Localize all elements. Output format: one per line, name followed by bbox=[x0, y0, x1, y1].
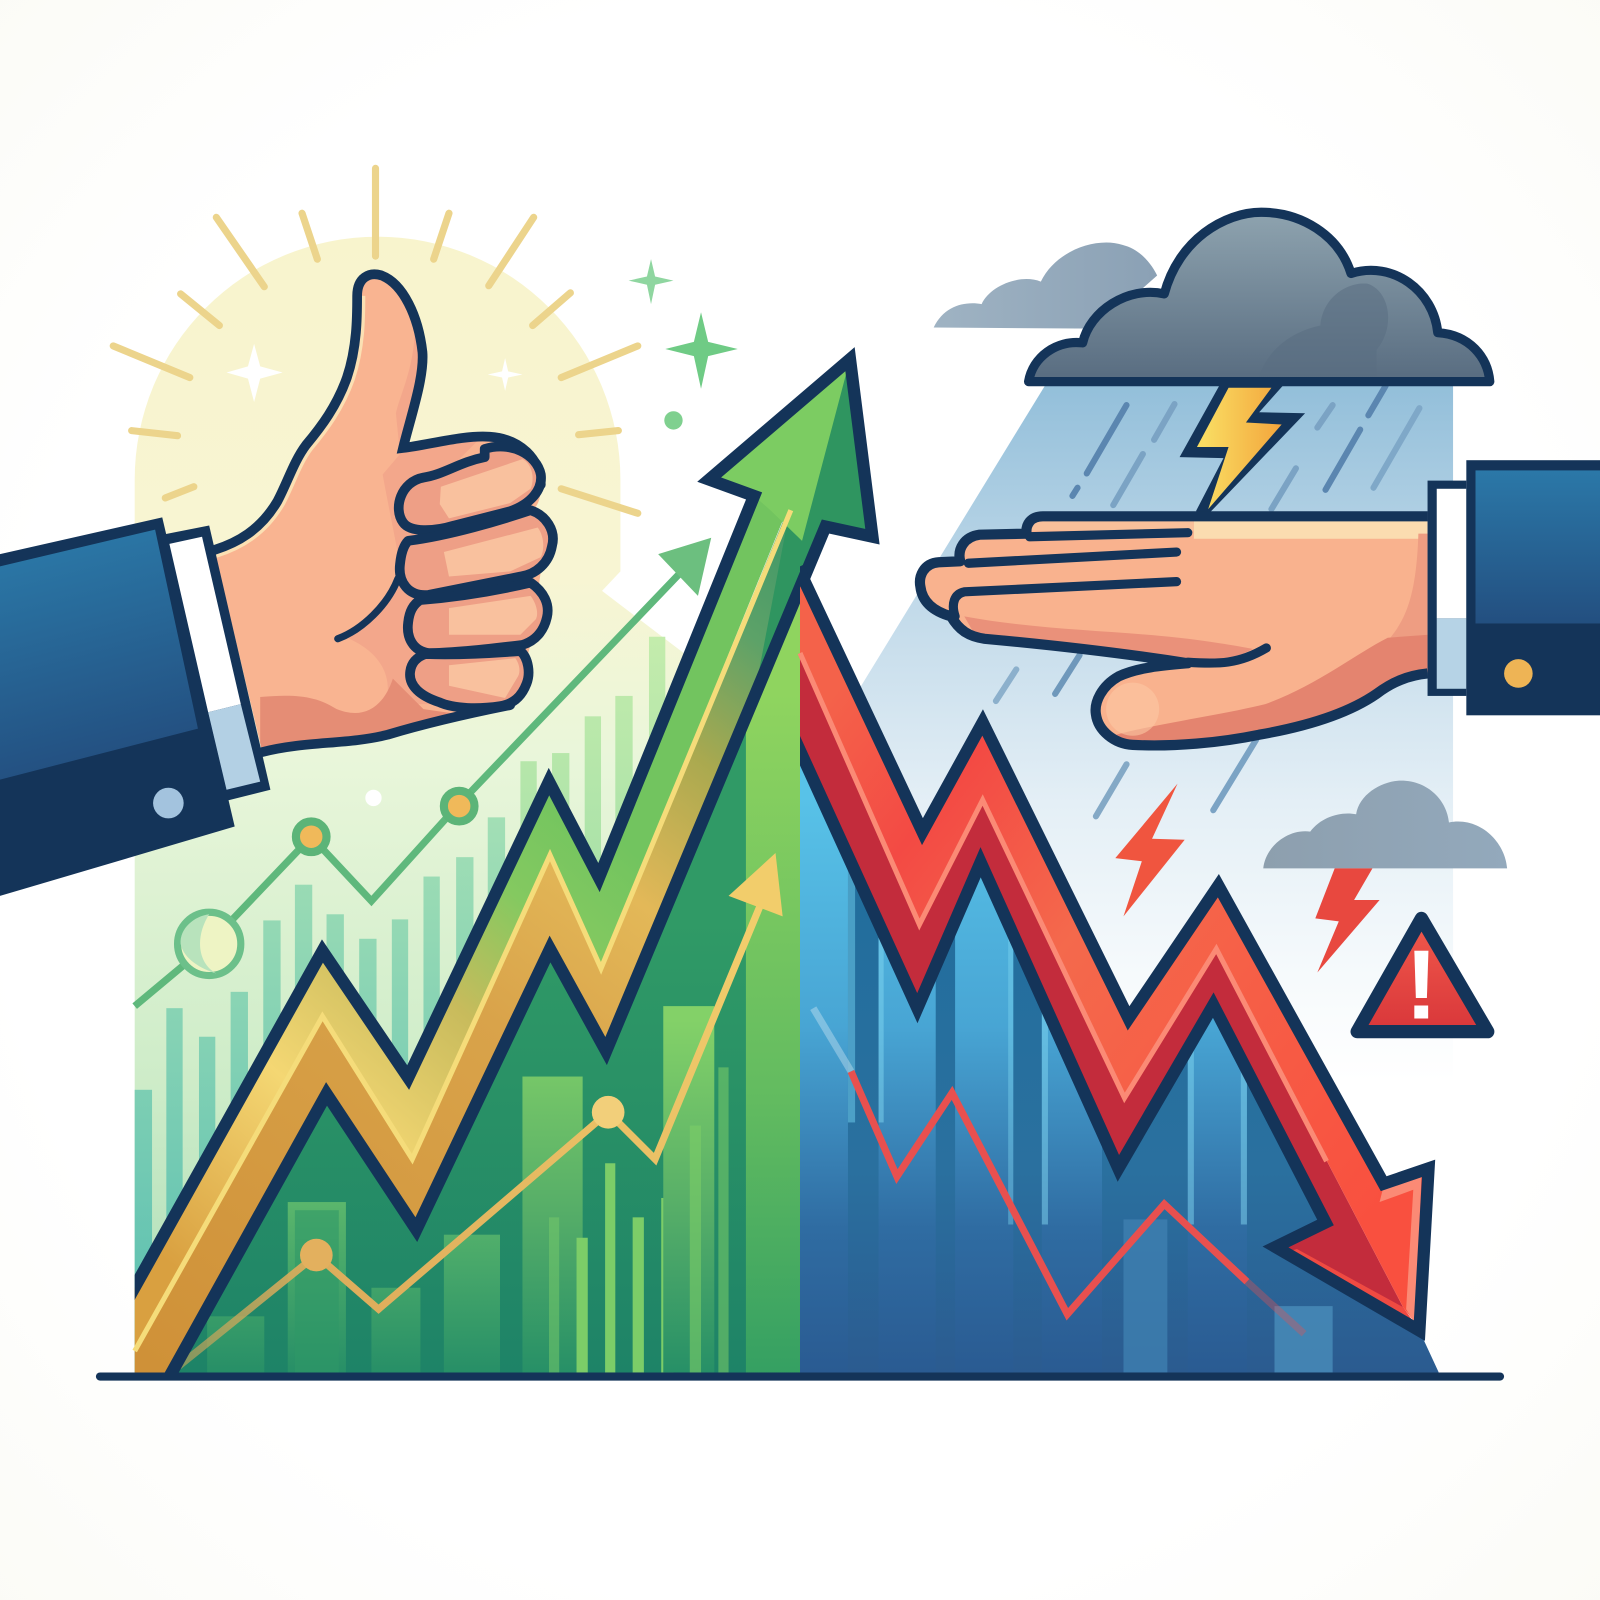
icons: sparkles bbox=[227, 259, 738, 806]
arrow head left facet bbox=[709, 359, 850, 541]
sleeve button bbox=[153, 788, 184, 818]
icon: rain streaks bbox=[996, 386, 1419, 816]
arrow upper band bbox=[135, 359, 850, 1351]
illustration: thumbs up growth versus storm decline bbox=[0, 164, 1600, 1381]
arrow: main red falling zigzag bbox=[791, 567, 1429, 1331]
thumb crease bbox=[338, 579, 398, 639]
hand fill bbox=[920, 516, 1428, 745]
arrow pink inner line bbox=[800, 653, 1327, 1161]
icon: red lightning left bbox=[1115, 784, 1185, 916]
icon: lightning bolt bbox=[1180, 384, 1305, 514]
right suit sleeve bbox=[1466, 460, 1600, 715]
area: dark green under rising arrow bbox=[171, 602, 800, 1372]
finger lines bbox=[953, 533, 1266, 663]
icon: small grey cloud bbox=[1263, 781, 1507, 868]
left shirt cuff bbox=[162, 526, 270, 801]
panel: stormy decline background bbox=[800, 386, 1453, 1082]
icon: main storm cloud bbox=[1029, 212, 1490, 382]
right shirt cuff bbox=[1428, 481, 1466, 696]
icon: distant grey cloud bbox=[934, 243, 1157, 329]
line chart: thin red falling line bbox=[813, 1008, 1304, 1334]
area: blue bars under falling arrow bbox=[800, 766, 1439, 1372]
hand outline bbox=[214, 274, 541, 752]
right hand: flat palm down bbox=[920, 516, 1429, 750]
arrow dark red lower band bbox=[800, 653, 1416, 1327]
line chart: gold rising line with arrow bbox=[179, 853, 783, 1366]
left suit sleeve bbox=[0, 517, 235, 896]
arrow navy outline bbox=[791, 567, 1429, 1331]
arrow head rim highlights bbox=[1380, 1177, 1421, 1324]
palm and thumb bbox=[214, 274, 541, 752]
finger three bbox=[408, 583, 548, 653]
icon: red lightning right bbox=[1315, 868, 1380, 972]
chart baseline bbox=[100, 1373, 1500, 1381]
sleeve button bbox=[1504, 659, 1533, 688]
arrow head right facet bbox=[753, 359, 872, 702]
panel: sunny growth background bbox=[135, 237, 800, 1372]
finger one bbox=[399, 447, 541, 530]
arrow orange upper band bbox=[800, 584, 1424, 1324]
arrow yellow inner line bbox=[135, 510, 791, 1351]
bar chart: green foreground bars bbox=[207, 571, 800, 1372]
hand shading bbox=[214, 296, 480, 760]
arrow: main green and gold rising zigzag bbox=[122, 359, 872, 1388]
line chart: green rising line with markers bbox=[135, 538, 711, 1006]
finger four bbox=[410, 651, 529, 708]
finger two bbox=[400, 510, 553, 595]
hand shading bbox=[964, 516, 1429, 750]
left hand: thumbs up bbox=[214, 274, 553, 760]
arrow navy outline bbox=[122, 359, 872, 1388]
arrow lower band bbox=[135, 359, 872, 1372]
icon: warning triangle: ! bbox=[1405, 929, 1438, 1039]
icon: warning triangle bbox=[1357, 918, 1488, 1039]
sun rays bbox=[113, 168, 638, 513]
hand outline bbox=[920, 516, 1428, 745]
bar chart: pale background bars bbox=[135, 637, 665, 1372]
